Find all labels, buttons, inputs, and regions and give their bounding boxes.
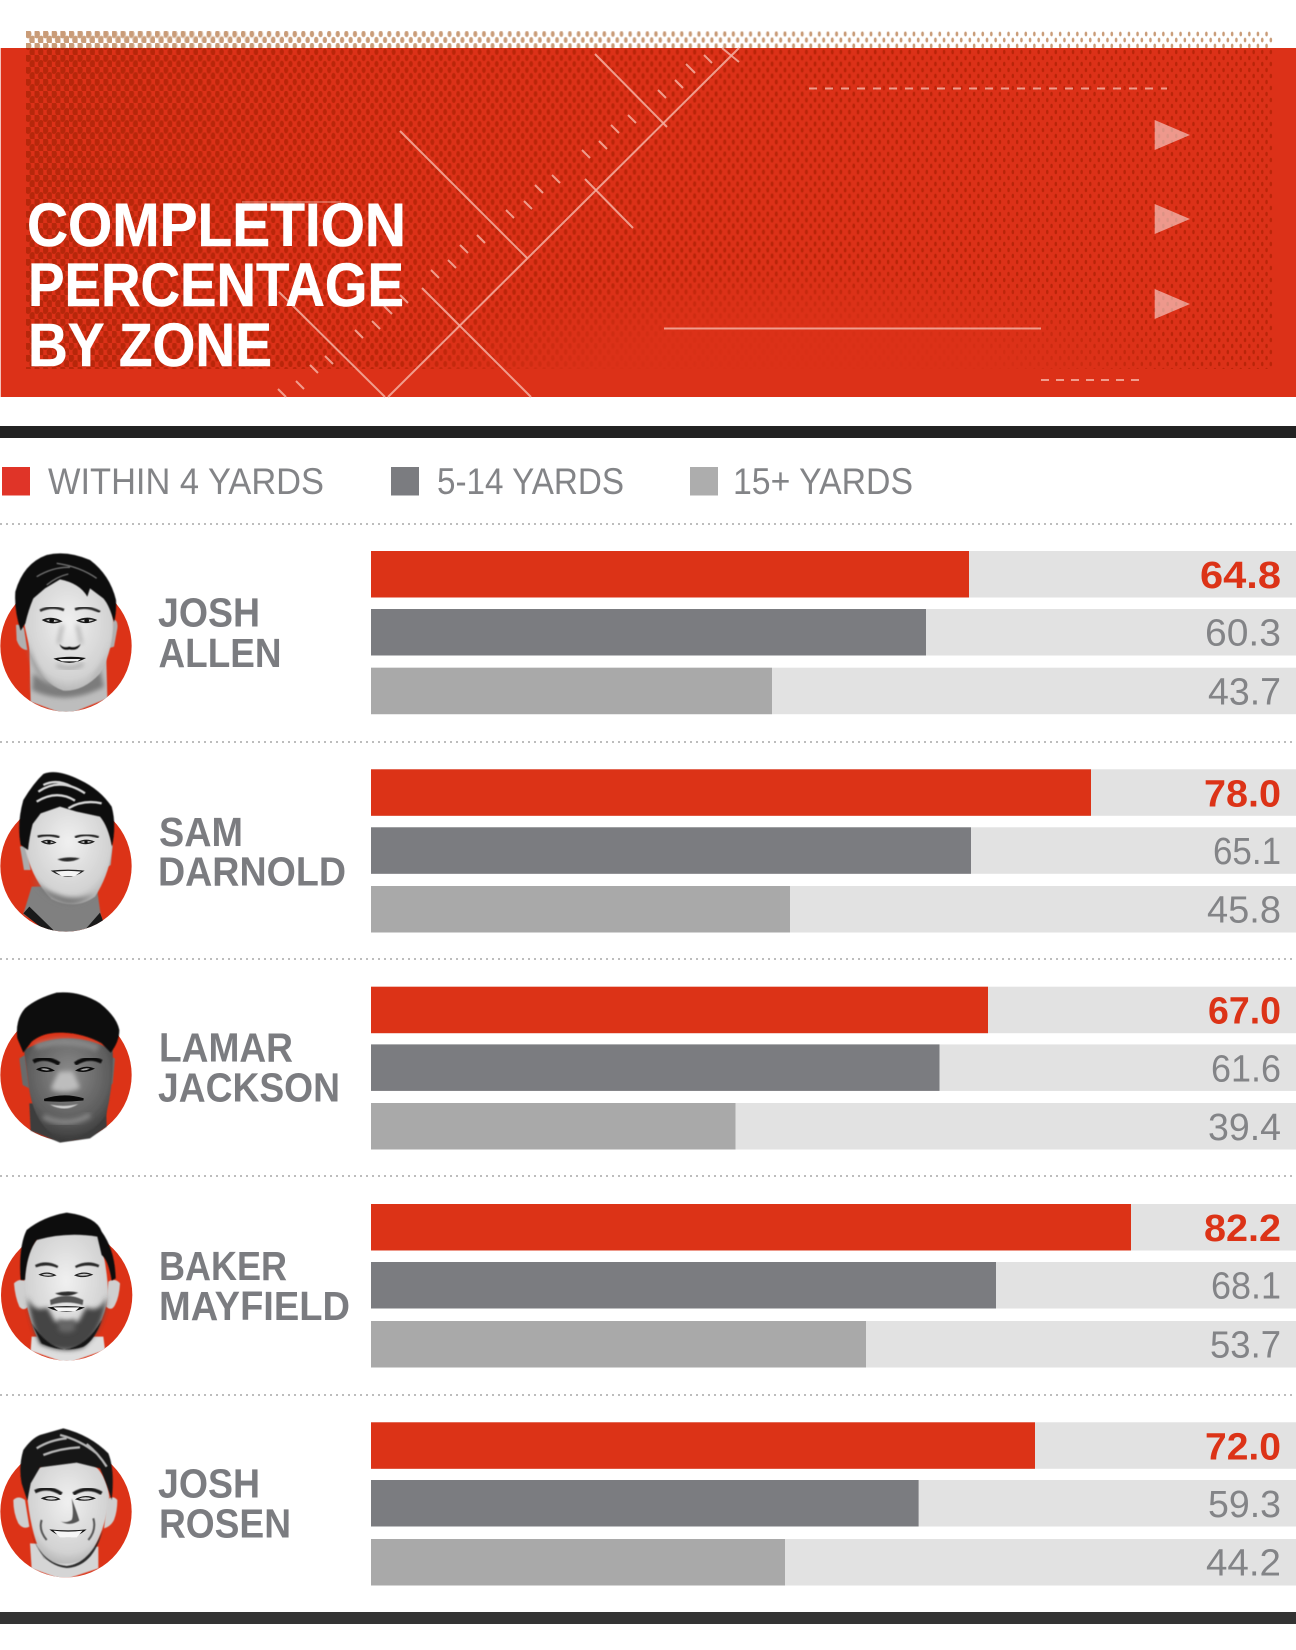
name: ALLEN: [158, 630, 282, 676]
title: BY ZONE: [28, 311, 272, 379]
portrait: Lamar Jackson: [0, 992, 132, 1143]
name: [158, 1025, 340, 1111]
name: ROSEN: [159, 1501, 291, 1547]
row: Josh Allen: [0, 551, 1296, 715]
name: BAKER: [159, 1243, 287, 1289]
bars: [371, 1204, 1296, 1368]
row: Lamar Jackson: [0, 987, 1296, 1150]
name: [159, 1243, 350, 1329]
name: SAM: [159, 809, 243, 855]
bars: [371, 987, 1296, 1150]
bars: 45.8: [1207, 890, 1281, 932]
bars: 61.6: [1211, 1048, 1281, 1090]
bars: 82.2: [1204, 1208, 1281, 1250]
name: [158, 590, 282, 676]
legend: within 4 yards: WITHIN 4 YARDS: [48, 461, 324, 502]
bars: 64.8: [1200, 555, 1281, 597]
bars: 65.1: [1213, 831, 1281, 873]
row: Sam Darnold: [0, 769, 1296, 933]
bars: 72.0: [1205, 1426, 1281, 1468]
name: MAYFIELD: [159, 1283, 350, 1329]
bars: 68.1: [1211, 1266, 1281, 1308]
name: DARNOLD: [158, 849, 346, 895]
dotted strip above banner: [26, 31, 1273, 48]
portrait: Baker Mayfield: [1, 1213, 132, 1363]
legend: 15+ yards: 15+ YARDS: [733, 461, 913, 502]
legend: [2, 461, 913, 502]
bars: [371, 551, 1296, 714]
top rule: [0, 426, 1296, 438]
title: COMPLETION: [27, 191, 406, 259]
arrows: [1155, 120, 1190, 319]
name: [158, 1461, 291, 1547]
name: JOSH: [158, 1461, 260, 1507]
row: Baker Mayfield: [1, 1204, 1296, 1368]
row: Josh Rosen: [0, 1422, 1296, 1586]
bottom rule: [0, 1612, 1296, 1624]
header banner: [1, 31, 1296, 397]
bars: 59.3: [1208, 1484, 1281, 1526]
bars: 53.7: [1210, 1325, 1281, 1367]
football field lines: [242, 48, 1167, 397]
name: [158, 809, 346, 895]
name: LAMAR: [159, 1025, 293, 1071]
bars: 60.3: [1205, 613, 1281, 655]
portrait: Josh Rosen: [0, 1428, 132, 1580]
name: JACKSON: [158, 1065, 340, 1111]
portrait: Sam Darnold: [0, 772, 132, 933]
title: [27, 191, 406, 379]
bars: 44.2: [1206, 1543, 1281, 1585]
red banner background: [1, 48, 1296, 397]
legend: 5-14 yards: 5-14 YARDS: [437, 461, 624, 502]
name: JOSH: [158, 590, 260, 636]
bars: 78.0: [1204, 773, 1281, 815]
bars: 67.0: [1208, 991, 1281, 1033]
bars: [371, 769, 1296, 932]
bars: 39.4: [1208, 1107, 1281, 1149]
bars: 43.7: [1208, 671, 1281, 713]
halftone texture: [26, 48, 1273, 369]
bars: [371, 1422, 1296, 1586]
title: PERCENTAGE: [28, 251, 404, 319]
portrait: Josh Allen: [0, 553, 132, 715]
